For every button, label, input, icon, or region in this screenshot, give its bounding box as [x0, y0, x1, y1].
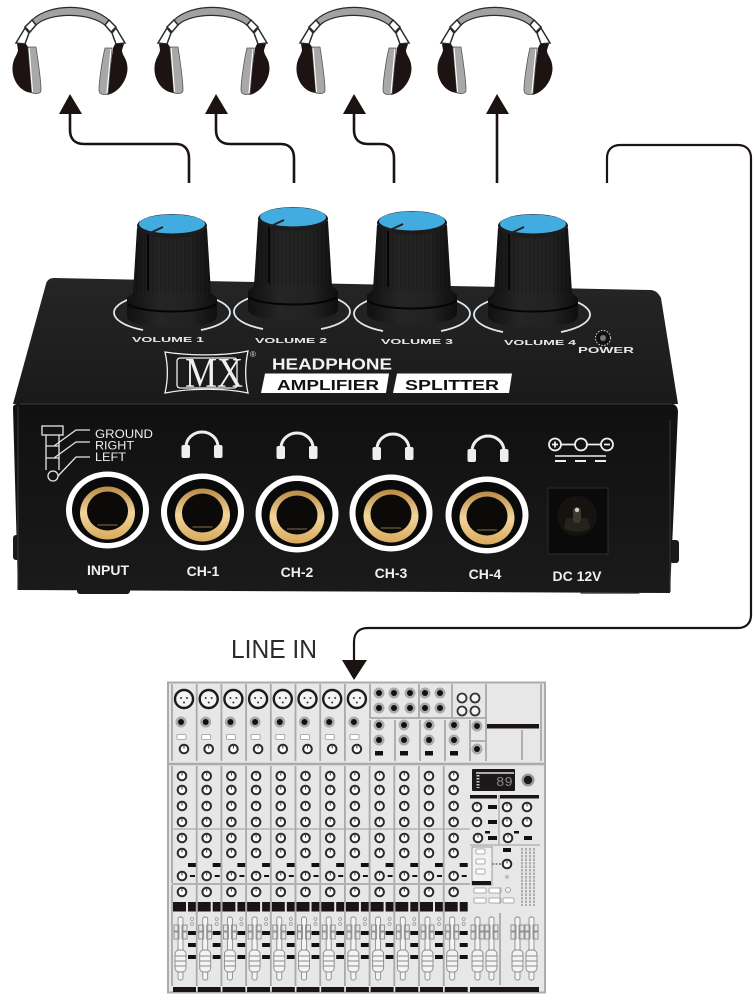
knob: volume 4 — [488, 214, 578, 327]
volume labels: VOLUME 4 — [504, 338, 578, 347]
volume labels: VOLUME 2 — [255, 336, 327, 345]
product name — [261, 356, 512, 394]
jack: channel 2 — [256, 476, 338, 552]
icon: headphones 1 — [12, 7, 127, 95]
headphones row — [12, 7, 552, 95]
arrow: line in cable from amplifier to mixer — [342, 145, 751, 680]
master faders — [470, 913, 539, 992]
icon: stereo plug wiring legend — [42, 426, 153, 481]
jack labels: DC 12V — [552, 568, 602, 584]
mixer body — [168, 682, 545, 992]
top right output panel — [487, 684, 541, 761]
knob: volume 3 — [367, 211, 457, 324]
icons: channel headphones — [182, 432, 508, 462]
device feet — [13, 535, 679, 594]
rca connectors — [458, 694, 480, 716]
brand logo: MX: MX — [185, 351, 243, 397]
dc power socket — [548, 488, 608, 554]
brand logo: MX: ® — [250, 350, 256, 359]
device front face — [13, 404, 678, 593]
volume labels: VOLUME 1 — [132, 335, 204, 344]
arrow: volume 1 to headphones 1 — [59, 94, 189, 183]
jack labels: CH-1 — [187, 563, 220, 579]
icon: dc polarity — [549, 438, 613, 461]
icon: stereo plug wiring legend: RIGHT — [95, 440, 134, 452]
icon: headphones 2 — [154, 7, 270, 95]
jack: input — [66, 472, 149, 548]
volume labels — [132, 335, 578, 347]
label: line in: LINE IN — [231, 636, 317, 664]
jack labels: INPUT — [87, 562, 129, 578]
product name: SPLITTER — [405, 377, 499, 394]
jack: channel 1 — [161, 474, 244, 550]
mono channel inputs — [172, 684, 366, 761]
jack labels: CH-4 — [469, 566, 502, 582]
arrow: volume 2 to headphones 2 — [205, 94, 294, 183]
product name: AMPLIFIER — [277, 377, 379, 394]
icon: stereo plug wiring legend: GROUND — [95, 429, 153, 441]
audio mixer diagram — [168, 682, 545, 992]
jack: channel 4 — [446, 476, 528, 554]
arrow: volume 3 to headphones 3 — [343, 94, 394, 183]
device top surface — [13, 278, 678, 404]
jack labels: CH-2 — [281, 564, 314, 580]
arrow: volume 4 to headphones 4 — [486, 94, 509, 183]
led display: 89 — [496, 775, 513, 791]
icon: headphones 3 — [296, 7, 412, 95]
volume labels: VOLUME 3 — [381, 337, 453, 346]
icon: stereo plug wiring legend: LEFT — [95, 452, 126, 464]
knob: volume 2 — [248, 207, 338, 320]
level meter grid — [522, 848, 534, 906]
jack labels: CH-3 — [375, 565, 408, 581]
channel strips — [172, 766, 470, 992]
main knob — [522, 774, 534, 786]
knob: volume 1 — [127, 214, 217, 327]
led display — [472, 769, 515, 791]
icon: headphones 4 — [437, 7, 552, 95]
jack labels — [87, 562, 602, 584]
product name: HEADPHONE — [272, 356, 392, 374]
routing switch block — [472, 847, 514, 904]
power led and label: POWER — [578, 345, 634, 355]
stereo input jacks — [370, 684, 486, 761]
volume scale rings — [114, 292, 590, 332]
power led and label — [578, 330, 634, 355]
jack: channel 3 — [350, 474, 432, 552]
master section controls — [470, 795, 540, 879]
headphone amplifier device — [13, 207, 679, 594]
